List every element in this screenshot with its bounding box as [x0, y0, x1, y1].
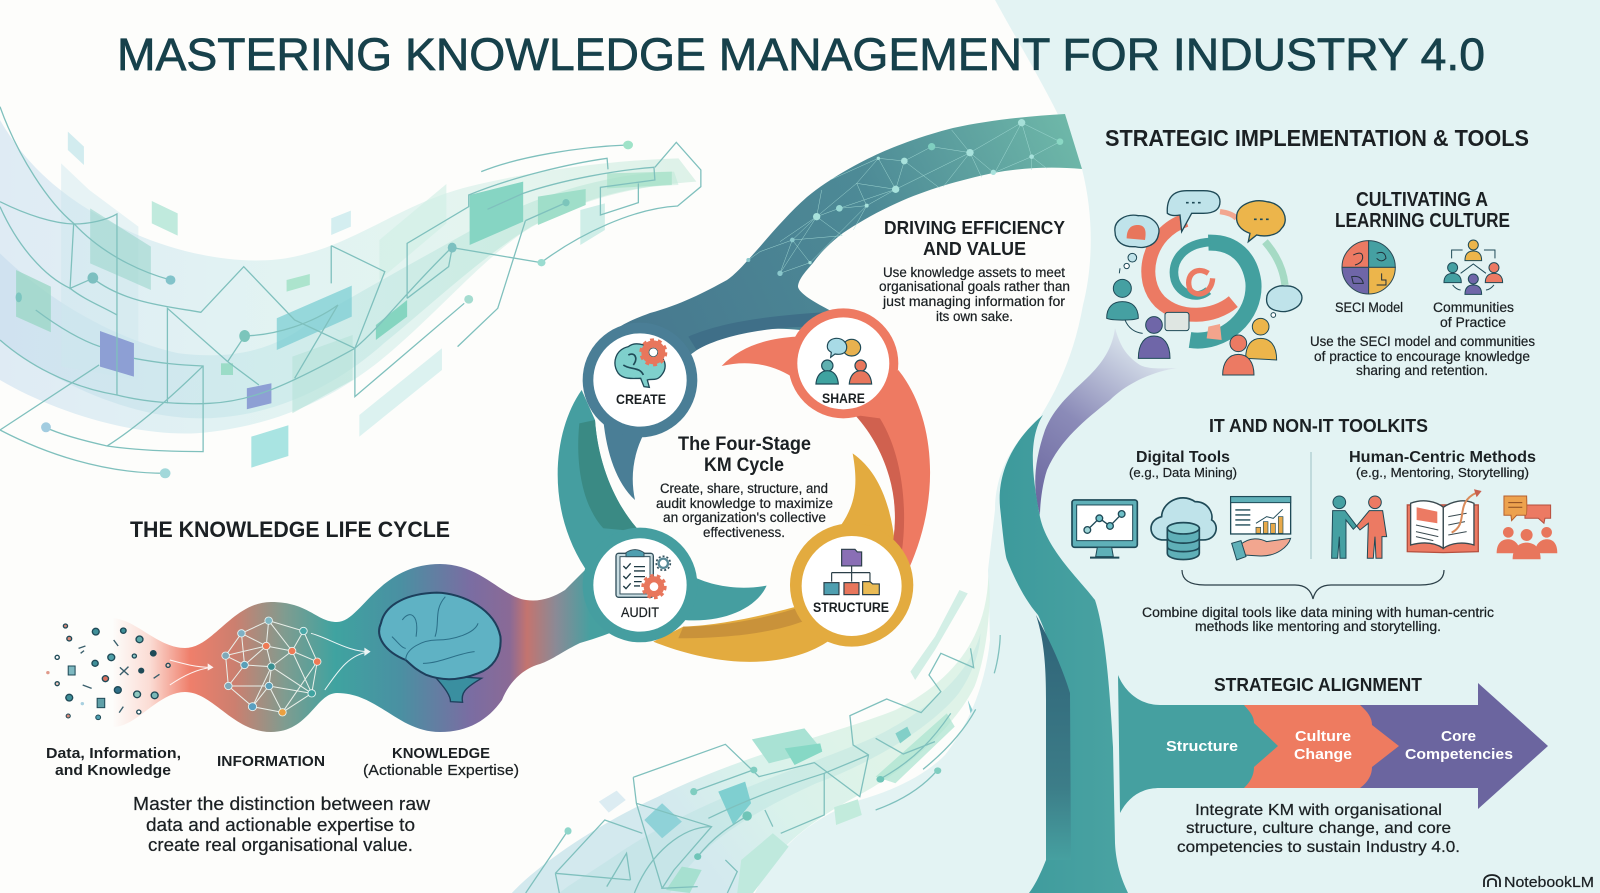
text: strategic alignment description: Integrate KM with organisational: [1195, 802, 1442, 819]
arrow segment: structure: [1118, 675, 1278, 813]
cycle arc: share coral: [722, 337, 930, 570]
cycle arc: structure gold: [653, 453, 895, 662]
text: learning culture description: of practice to encourage knowledge: [1314, 349, 1530, 364]
ring: audit: [583, 528, 697, 642]
cycle arc: audit teal: [558, 390, 640, 568]
stage label: share: SHARE: [822, 391, 865, 406]
heading: four-stage KM cycle: KM Cycle: [704, 455, 784, 476]
icon: structure hierarchy: [824, 549, 879, 595]
arrow segment: culture change: [1238, 705, 1399, 788]
text: cycle description: Create, share, structure, and: [660, 481, 828, 496]
icon: storytelling book: [1407, 489, 1482, 553]
icon: discussion group: [1497, 496, 1557, 559]
icon: communities of practice: [1444, 240, 1503, 294]
heading: human-centric methods: [1349, 449, 1536, 480]
title: MASTERING KNOWLEDGE MANAGEMENT FOR INDUSTRY 4.0: [117, 29, 1485, 80]
label: data: [46, 745, 181, 779]
heading: digital tools: [1129, 449, 1237, 480]
cycle arc: create blue: [603, 312, 833, 500]
ring: structure: [790, 523, 913, 647]
text: life cycle summary: create real organisational value.: [148, 835, 413, 855]
label: knowledge: (Actionable Expertise): [363, 762, 519, 779]
background: right panel: [755, 0, 1600, 893]
text: driving efficiency description: Use knowledge assets to meet: [883, 265, 1065, 280]
heading: driving efficiency and value: [884, 217, 1066, 259]
label: information: INFORMATION: [217, 753, 325, 770]
ring: share: [788, 308, 898, 418]
text: driving efficiency description: [879, 265, 1070, 324]
label: communities of practice: Communities: [1433, 300, 1514, 315]
heading: digital tools: Digital Tools: [1136, 449, 1230, 466]
text: toolkits description: Combine digital tools like data mining with human-centric: [1142, 605, 1494, 620]
text: life cycle summary: data and actionable expertise to: [146, 815, 415, 835]
brace: [1182, 570, 1444, 599]
logo: NotebookLM: NotebookLM: [1504, 874, 1594, 891]
icon: dashboard and hand: [1231, 497, 1291, 560]
label: culture change: Culture: [1295, 728, 1351, 745]
text: strategic alignment description: structure, culture change, and core: [1186, 820, 1451, 837]
label: data: and Knowledge: [55, 762, 171, 779]
stage label: create: CREATE: [616, 392, 666, 407]
text: cycle description: [656, 481, 833, 540]
text: strategic alignment description: [1177, 802, 1460, 856]
heading: IT and non-IT toolkits: IT AND NON-IT TOOLKITS: [1209, 415, 1428, 436]
connector: knowledge funnel stream: [113, 564, 610, 732]
label: knowledge: KNOWLEDGE: [392, 745, 490, 762]
arrows: life cycle flow: [170, 633, 371, 690]
text: learning culture description: [1310, 334, 1535, 378]
text: strategic alignment description: competencies to sustain Industry 4.0.: [1177, 839, 1460, 856]
label: culture change: [1294, 728, 1352, 763]
label: data: Data, Information,: [46, 745, 181, 762]
label: core competencies: [1405, 728, 1513, 763]
stage label: structure: STRUCTURE: [813, 600, 889, 615]
icon: audit clipboard and gears: [616, 550, 670, 598]
label: SECI model: SECI Model: [1335, 300, 1403, 315]
icon: monitor chart: [1072, 500, 1137, 558]
left data ribbon: [0, 107, 701, 478]
arrow segment: core competencies: [1340, 683, 1548, 809]
text: toolkits description: methods like mentoring and storytelling.: [1195, 619, 1441, 634]
heading: strategic implementation and tools: STRATEGIC IMPLEMENTATION & TOOLS: [1105, 125, 1529, 151]
text: life cycle summary: [133, 794, 431, 855]
text: driving efficiency description: organisational goals rather than: [879, 279, 1070, 294]
audit tail: [683, 573, 767, 620]
heading: driving efficiency and value: DRIVING EFFICIENCY: [884, 217, 1066, 238]
text: driving efficiency description: its own sake.: [936, 309, 1013, 324]
icon: cloud database: [1151, 498, 1216, 560]
text: toolkits description: [1142, 605, 1494, 634]
heading: strategic alignment: STRATEGIC ALIGNMENT: [1214, 674, 1423, 695]
label: culture change: Change: [1294, 746, 1352, 763]
label: communities of practice: [1433, 300, 1514, 330]
strategic alignment arrow: [1118, 675, 1548, 813]
icon: create brain and gear: [615, 340, 666, 387]
heading: driving efficiency and value: AND VALUE: [923, 238, 1026, 259]
text: learning culture description: Use the SECI model and communities: [1310, 334, 1535, 349]
icon: information network: [222, 617, 321, 716]
heading: the knowledge life cycle: THE KNOWLEDGE LIFE CYCLE: [130, 517, 450, 542]
heading: human-centric methods: (e.g., Mentoring, Storytelling): [1356, 466, 1529, 480]
icon: share people and speech: [816, 338, 872, 384]
text: driving efficiency description: just managing information for: [882, 294, 1066, 309]
label: knowledge: [363, 745, 519, 779]
icon: learning spiral with people: [1107, 191, 1302, 375]
heading: four-stage KM cycle: The Four-Stage: [678, 434, 811, 455]
ribbon: purple flow: [1035, 328, 1177, 515]
heading: four-stage KM cycle: [678, 434, 811, 476]
lower data ribbon: [512, 577, 1000, 893]
swoosh: driving efficiency band: [612, 114, 1082, 362]
ring: create: [583, 323, 697, 437]
label: structure: Structure: [1166, 738, 1238, 755]
heading: cultivating a learning culture: CULTIVATING A: [1356, 189, 1488, 211]
text: cycle description: audit knowledge to maximize: [656, 496, 833, 511]
ribbon: teal stem: [1000, 415, 1128, 893]
text: cycle description: an organization's collective: [663, 510, 826, 525]
icon: brain: [379, 593, 501, 702]
swoosh: network overlay: [746, 119, 1063, 276]
heading: digital tools: (e.g., Data Mining): [1129, 466, 1237, 480]
stage label: audit: AUDIT: [621, 605, 659, 620]
text: cycle description: effectiveness.: [703, 525, 785, 540]
icon: SECI quadrants: [1342, 241, 1395, 294]
label: core competencies: Core: [1441, 728, 1476, 745]
label: communities of practice: of Practice: [1440, 315, 1506, 330]
heading: human-centric methods: Human-Centric Methods: [1349, 449, 1536, 466]
four-stage KM cycle: [558, 308, 930, 662]
text: life cycle summary: Master the distinction between raw: [133, 794, 431, 814]
heading: cultivating a learning culture: LEARNING CULTURE: [1335, 210, 1510, 232]
text: learning culture description: sharing and retention.: [1356, 363, 1488, 378]
icon: handshake people: [1332, 496, 1387, 558]
label: core competencies: Competencies: [1405, 746, 1513, 763]
icon: scattered data points: [46, 624, 170, 720]
heading: cultivating a learning culture: [1335, 189, 1510, 232]
